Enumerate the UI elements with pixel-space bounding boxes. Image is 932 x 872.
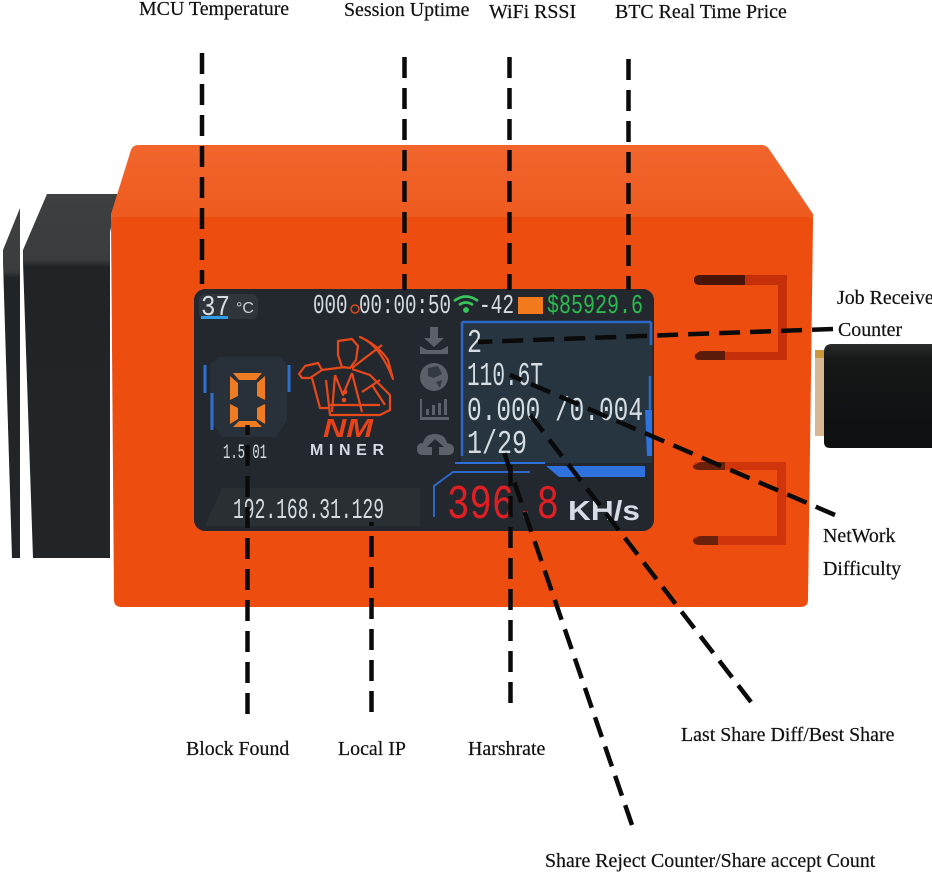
label: Job Receive Counter: Job Receive <box>837 287 932 309</box>
bitcoin badge <box>518 297 543 314</box>
label: Block Found: Block Found <box>186 738 289 760</box>
temperature badge <box>199 291 258 324</box>
label: Harshrate: Harshrate <box>468 738 545 760</box>
label: Job Receive Counter <box>837 287 932 341</box>
BTC price: $85929.6 <box>547 292 643 322</box>
top vent slot <box>694 275 787 360</box>
block found panel: 1.5.01 <box>223 442 267 465</box>
share reject and accept values: 1/29 <box>467 426 527 463</box>
dashed leader lines <box>202 53 835 825</box>
icon: cloud upload <box>417 434 454 455</box>
miner logo <box>299 337 393 459</box>
network difficulty value: 110.6T <box>467 358 543 395</box>
label: Share Reject Counter/Share accept Count: Share Reject Counter/Share accept Count <box>545 850 876 872</box>
label: Network Difficulty <box>823 525 901 580</box>
bottom vent slot <box>693 462 786 545</box>
job counter: 2 <box>467 325 482 362</box>
icon: download <box>420 327 448 354</box>
status icons column <box>417 327 454 455</box>
session uptime: 000 00:00:50 <box>313 292 451 322</box>
local IP address: 192.168.31.129 <box>233 494 384 527</box>
label: Network Difficulty: NetWork <box>823 525 895 547</box>
data panel frame <box>462 322 651 456</box>
seven segment digit <box>230 373 265 427</box>
share diff and best share values: 0.000 /0.004 <box>467 393 643 430</box>
label: Job Receive Counter: Counter <box>838 319 902 341</box>
orange device body <box>111 145 813 607</box>
black connector on left side <box>3 194 118 558</box>
miner logo: MINER <box>310 442 384 459</box>
icon: bar chart <box>420 399 449 420</box>
temperature badge: °C <box>236 300 254 317</box>
wifi signal value: -42 <box>479 292 514 322</box>
block found panel <box>205 357 289 465</box>
icon: globe <box>420 363 448 391</box>
wifi icon <box>454 296 478 312</box>
LCD screen <box>194 289 654 533</box>
label: Local IP: Local IP <box>338 738 406 760</box>
hashrate panel: KH/s <box>568 495 640 526</box>
miner logo: NM <box>323 413 375 443</box>
label: Last Share Diff/Best Share: Last Share Diff/Best Share <box>681 724 895 746</box>
label: BTC Real Time Price: BTC Real Time Price <box>615 1 787 23</box>
temperature badge: 37 <box>201 291 230 324</box>
label: Network Difficulty: Difficulty <box>823 558 901 580</box>
hashrate panel: 396.8 <box>447 479 559 533</box>
label: WiFi RSSI: WiFi RSSI <box>489 1 576 23</box>
USB cable on right side <box>815 344 932 448</box>
hashrate panel <box>434 463 645 533</box>
